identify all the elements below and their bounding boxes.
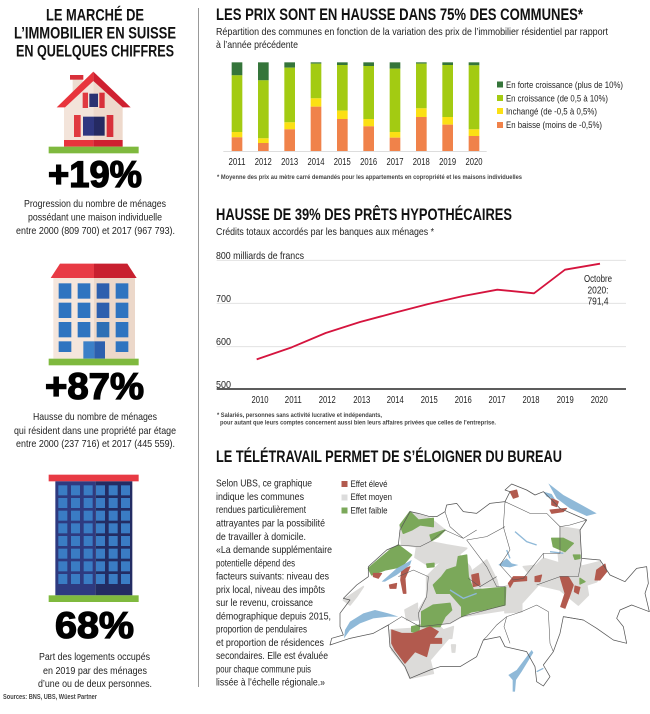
axis labels: line chart years: 2016 <box>455 395 472 406</box>
axis labels: bar chart years: 2015 <box>334 157 351 168</box>
heading: telework: LE TÉLÉTRAVAIL PERMET DE S’ÉLOIGNER DU BUREAU <box>216 447 562 466</box>
text: telework paragraph: pour chaque commune puis <box>216 664 311 675</box>
text: telework paragraph: secondaires. Elle est évaluée <box>216 651 328 662</box>
axis labels: bar chart years: 2013 <box>281 157 298 168</box>
axis labels: bar chart years: 2020 <box>466 157 483 168</box>
legend: map: Effet élevé <box>350 479 388 490</box>
text: mortgages subtitle: Crédits totaux accordés par les banques aux ménages * <box>216 227 434 238</box>
text: prices subtitle: à l’année précédente <box>216 40 298 51</box>
text: tower caption: en 2019 par des ménages <box>43 666 147 677</box>
axis labels: bar chart years: 2014 <box>308 157 325 168</box>
axis labels: line chart values: 800 milliards de francs <box>216 250 304 262</box>
statistic: +19%: +19% <box>48 154 142 195</box>
text: apartment caption <box>14 412 176 450</box>
axis labels: line chart years: 2014 <box>387 395 404 406</box>
legend: bar chart: En baisse (moins de -0,5%) <box>506 120 602 131</box>
axis labels: line chart years <box>252 395 608 406</box>
axis labels: bar chart years <box>228 157 483 168</box>
icon: house <box>49 72 139 153</box>
axis labels: line chart values <box>216 250 304 391</box>
axis labels: line chart years: 2019 <box>557 395 574 406</box>
callout: October 2020 value: 2020: <box>588 286 608 296</box>
text: telework paragraph: prix local, niveau des impôts <box>216 585 325 596</box>
title: left column: LE MARCHÉ DE <box>46 6 144 24</box>
footnote: line chart <box>217 412 496 426</box>
statistic: +87%: +87% <box>45 366 144 407</box>
legend: map: Effet faible <box>350 506 388 516</box>
axis labels: line chart years: 2017 <box>488 395 506 406</box>
footnote: line chart: * Salariés, personnes sans activité lucrative et indépendants, <box>217 412 382 419</box>
text: telework paragraph: et proportion de résidences <box>216 638 324 649</box>
text: telework paragraph: lissée à l’échelle régionale.» <box>216 678 325 689</box>
callout: October 2020 value: 791,4 <box>588 296 609 308</box>
axis labels: line chart years: 2013 <box>353 395 371 406</box>
low effect regions <box>368 512 585 633</box>
axis labels: bar chart years: 2019 <box>439 157 456 168</box>
axis labels: line chart years: 2020 <box>591 395 608 406</box>
text: telework paragraph: de travailler à domicile. <box>216 532 306 543</box>
text: telework paragraph: sur le revenu, croissance <box>216 598 313 609</box>
text: tower caption: d’une ou de deux personnes. <box>38 679 152 690</box>
title: left column: EN QUELQUES CHIFFRES <box>16 42 174 60</box>
high effect regions <box>373 490 607 663</box>
text: telework paragraph <box>216 479 332 689</box>
legend: map: Effet moyen <box>350 492 392 503</box>
text: house caption: entre 2000 (809 700) et 2017 (967 793). <box>16 226 175 237</box>
text: telework paragraph: potentielle dépend des <box>216 558 295 569</box>
text: telework paragraph: «La demande supplémentaire <box>216 545 332 556</box>
text: telework paragraph: Selon UBS, ce graphique <box>216 479 312 490</box>
text: telework paragraph: facteurs suivants: niveau des <box>216 572 329 583</box>
axis labels: line chart years: 2018 <box>522 395 540 406</box>
axis labels: line chart years: 2010 <box>252 395 269 406</box>
footnote: line chart: pour autant que leurs comptes concernent aussi bien leurs affaires privées que celles de l’entreprise. <box>220 420 496 426</box>
text: telework paragraph: proportion de pendulaires <box>216 625 307 636</box>
medium effect regions <box>343 512 602 678</box>
axis labels: bar chart years: 2018 <box>413 157 430 168</box>
legend: bar chart: Inchangé (de -0,5 à 0,5%) <box>506 106 597 118</box>
text: telework paragraph: attrayantes par la possibilité <box>216 518 325 530</box>
legend: bar chart: En forte croissance (plus de 10%) <box>506 80 623 91</box>
axis labels: bar chart years: 2012 <box>255 157 272 168</box>
line chart <box>217 260 626 389</box>
axis labels: bar chart years: 2017 <box>386 157 404 168</box>
axis labels: line chart years: 2015 <box>421 395 438 406</box>
footnote: bar chart: * Moyenne des prix au mètre carré demandés pour les appartements en copropriété et les maisons individuelles <box>217 174 522 181</box>
axis labels: bar chart years: 2016 <box>360 157 377 168</box>
heading: mortgages: HAUSSE DE 39% DES PRÊTS HYPOTHÉCAIRES <box>216 205 512 224</box>
text: telework paragraph: indique les communes <box>216 492 304 503</box>
text: apartment caption: Hausse du nombre de ménages <box>33 412 157 423</box>
axis labels: line chart years: 2011 <box>285 395 302 406</box>
title: left column: L’IMMOBILIER EN SUISSE <box>14 24 176 42</box>
text: tower caption: Part des logements occupés <box>39 652 150 663</box>
cantonal borders <box>388 502 587 652</box>
axis labels: line chart values: 700 <box>216 293 231 305</box>
text: apartment caption: qui résident dans une propriété par étage <box>14 426 176 437</box>
text: house caption: Progression du nombre de ménages <box>24 199 166 210</box>
legend: bar chart: En croissance (de 0,5 à 10%) <box>506 94 608 104</box>
text: telework paragraph: démographique depuis 2015, <box>216 611 331 622</box>
text: house caption <box>16 199 175 237</box>
icon: apartment building <box>49 264 139 365</box>
title: left column <box>14 6 176 60</box>
axis labels: bar chart years: 2011 <box>228 157 246 168</box>
callout: October 2020 value: Octobre <box>584 274 612 285</box>
national outline <box>330 484 649 686</box>
text: telework paragraph: rendues particulièrement <box>216 505 306 516</box>
lakes <box>344 483 597 692</box>
axis labels: line chart years: 2012 <box>319 395 336 406</box>
stacked bar chart <box>223 62 487 152</box>
legend: bar chart <box>497 80 623 131</box>
legend: map <box>342 479 392 516</box>
axis labels: line chart values: 500 <box>216 379 231 391</box>
statistic: 68%: 68% <box>55 605 134 646</box>
text: house caption: possédant une maison individuelle <box>28 212 162 224</box>
axis labels: line chart values: 600 <box>216 336 231 348</box>
text: tower caption <box>38 652 152 690</box>
icon: tower block <box>49 475 139 602</box>
callout: October 2020 value <box>584 274 612 308</box>
text: prices subtitle <box>216 27 608 51</box>
text: sources: Sources: BNS, UBS, Wüest Partner <box>3 694 97 701</box>
text: apartment caption: entre 2000 (237 716) et 2017 (445 559). <box>16 439 175 450</box>
map: Switzerland <box>330 483 649 692</box>
